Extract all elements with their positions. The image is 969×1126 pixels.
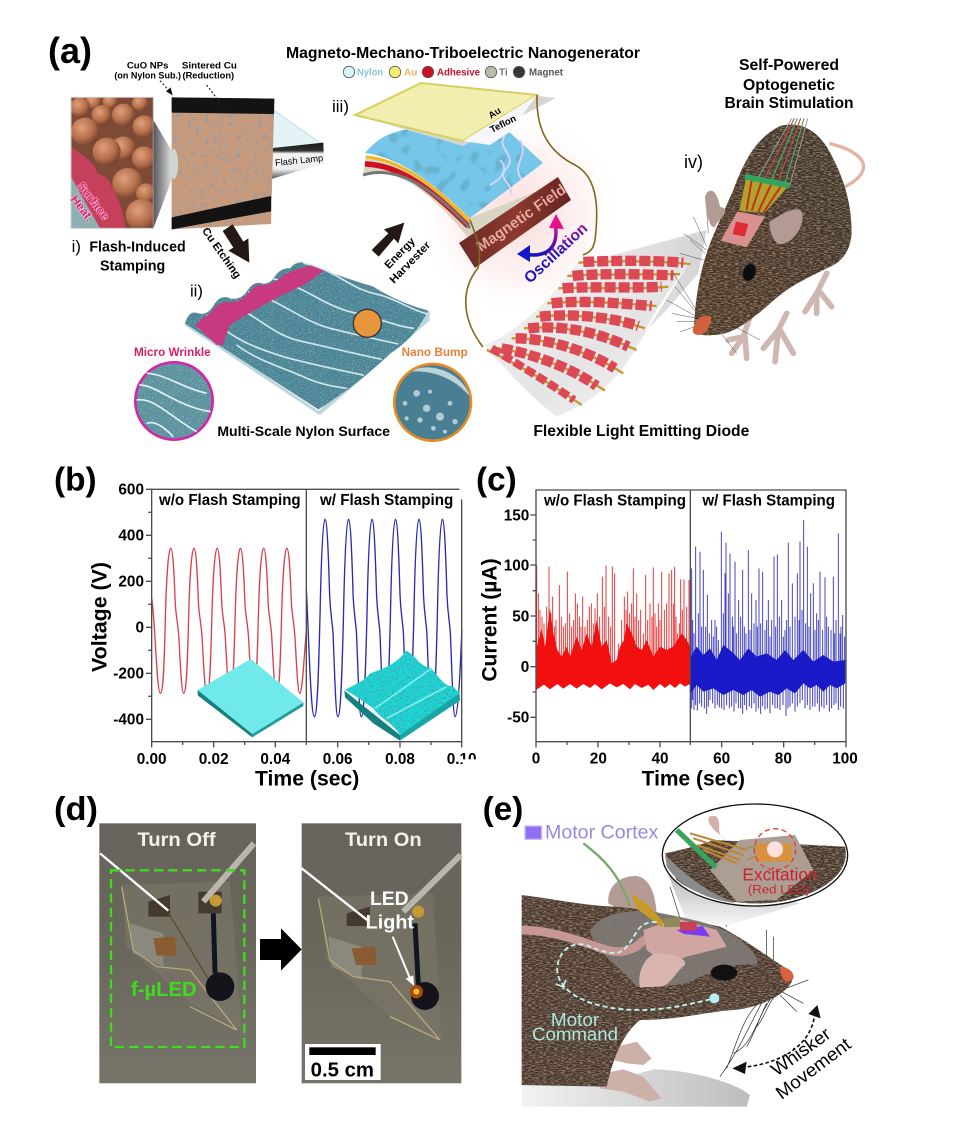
paws xyxy=(600,1042,662,1102)
mouse body xyxy=(522,895,792,1087)
labels and dashed pointers xyxy=(114,60,237,111)
mouse eye and nose xyxy=(693,262,758,335)
x axis labels: 0.00 xyxy=(137,751,167,768)
arrow: Cu etching: Cu Etching xyxy=(199,226,243,281)
y axis labels: 600 xyxy=(118,482,144,499)
front ear xyxy=(639,953,685,987)
material legend: Magnet xyxy=(529,68,564,78)
projection cone to inset xyxy=(668,875,800,925)
arrow: energy harvester: Energy xyxy=(383,235,418,271)
y axis labels: 0 xyxy=(521,659,529,676)
flexible LED sheet xyxy=(483,261,691,417)
magnet block with magnetic field label xyxy=(459,177,571,268)
sub-panel headings xyxy=(543,493,835,510)
brain stimulation heading: Brain Stimulation xyxy=(724,95,854,112)
motor command dashed path xyxy=(557,922,712,1010)
y axis title: Current (µA) xyxy=(478,558,501,682)
title of nanogenerator: Magneto-Mechano-Triboelectric Nanogenerator xyxy=(286,45,640,62)
brain stimulation heading: Optogenetic xyxy=(743,77,835,94)
excitation label: Excitation xyxy=(742,865,818,885)
label: f-µLED: f-µLED xyxy=(131,979,197,1001)
magnetic glow xyxy=(415,110,625,320)
inset: nano bump: Nano Bump xyxy=(402,346,468,359)
red current trace xyxy=(536,565,690,690)
command origin dot xyxy=(709,993,719,1003)
mouse whiskers xyxy=(667,210,760,353)
material legend xyxy=(343,66,564,78)
y axis labels: -400 xyxy=(113,711,144,728)
x axis labels: 0.10 xyxy=(447,751,477,768)
label: turn off: Turn Off xyxy=(137,829,216,851)
sub-panel headings: w/o Flash Stamping xyxy=(158,492,301,509)
arrow: energy harvester: Harvester xyxy=(388,239,434,286)
y axis labels: 0 xyxy=(135,620,144,637)
y axis labels: 400 xyxy=(118,528,144,545)
blue voltage trace xyxy=(306,519,462,717)
arrow between photos xyxy=(260,928,302,971)
red voltage trace xyxy=(152,548,306,693)
mouse tail xyxy=(829,143,864,188)
panel b: voltage chart xyxy=(54,462,483,790)
scale bar xyxy=(305,1044,381,1082)
floor shadow xyxy=(522,1069,750,1107)
LED caption: Flexible Light Emitting Diode xyxy=(533,423,749,440)
clipping patch over last tick label xyxy=(463,759,483,768)
motor cortex legend: Motor Cortex xyxy=(545,822,659,843)
material legend: Ti xyxy=(499,68,508,78)
step iii label: iii) xyxy=(332,97,349,116)
labels and dashed pointers: (on Nylon Sub.) xyxy=(114,71,181,81)
step iv label: iv) xyxy=(684,152,703,172)
inset: nano bump xyxy=(394,346,471,441)
teflon and gold contact plate xyxy=(355,83,556,146)
light cone of flash lamp xyxy=(267,111,323,177)
x axis labels: 20 xyxy=(590,751,607,768)
sub-panel headings xyxy=(158,492,453,509)
x axis labels: 0 xyxy=(532,751,540,768)
teflon and gold contact plate: Au xyxy=(487,105,503,122)
excitation label: (Red LED) xyxy=(748,882,810,896)
panel label e: (e) xyxy=(483,791,523,828)
flash lamp: Flash Lamp xyxy=(274,153,324,168)
whisker movement arrow and label: Movement xyxy=(771,1033,855,1103)
inset: copper spheres with surface heat xyxy=(68,94,158,231)
photo: turn on xyxy=(302,823,461,1083)
zoom wedge to substrate xyxy=(153,120,172,228)
triboelectric sparks xyxy=(490,135,523,195)
label: LED light with arrow: Light xyxy=(366,911,414,933)
x axis labels: 80 xyxy=(775,751,792,768)
x axis title: Time (sec) xyxy=(255,767,359,790)
whisker movement arrow and label xyxy=(732,1005,855,1103)
y axis labels: 50 xyxy=(512,608,529,625)
highlighted nano bump spot xyxy=(353,309,381,337)
inset: micro wrinkle xyxy=(134,346,213,440)
panel label a: (a) xyxy=(48,30,92,71)
x axis labels: 0.08 xyxy=(385,751,415,768)
teflon and gold contact plate: Teflon xyxy=(488,113,518,136)
label: LED light with arrow: LED xyxy=(370,889,409,910)
label: LED light with arrow xyxy=(366,889,414,986)
brain stimulation heading: Self-Powered xyxy=(739,57,839,74)
surgical window xyxy=(721,212,765,247)
y axis labels: -200 xyxy=(113,665,144,682)
label: turn on: Turn On xyxy=(345,829,422,851)
y axis labels: 100 xyxy=(504,557,529,574)
magnet block with magnetic field label: Magnetic Field xyxy=(474,181,569,255)
excitation label xyxy=(742,865,818,896)
axes and ticks xyxy=(530,490,846,747)
y axis labels xyxy=(504,507,529,727)
mouse ears xyxy=(705,191,803,244)
x axis labels xyxy=(532,751,858,768)
mouse body xyxy=(694,125,852,335)
flash lamp xyxy=(261,143,324,179)
whiskers xyxy=(670,887,808,1077)
y axis labels: 150 xyxy=(504,507,529,524)
implant window xyxy=(643,918,727,965)
y axis labels xyxy=(113,482,144,728)
panel d: LED photographs xyxy=(54,791,461,1083)
surface heat label: Surface xyxy=(74,179,113,223)
mouse eye and nose xyxy=(711,965,794,982)
arrow: energy harvester xyxy=(372,223,434,286)
LED glow xyxy=(410,985,423,998)
oscillation curved arrow and label: Oscillation xyxy=(521,220,591,287)
pink tail-like overlay xyxy=(522,930,713,952)
green dashed outline xyxy=(111,870,244,1047)
y axis labels: 200 xyxy=(118,574,144,591)
whisker movement arrow and label: Whisker xyxy=(767,1023,834,1080)
substrate with CuO nanoparticles and sintered Cu xyxy=(170,97,274,229)
step i caption xyxy=(72,237,186,275)
motor command label: Motor xyxy=(551,1009,599,1030)
flexible cable xyxy=(739,118,808,213)
flexible implant cable xyxy=(583,843,680,927)
photo: turn off xyxy=(99,823,256,1083)
panel label d: (d) xyxy=(54,791,98,828)
inset: flat nylon slab xyxy=(198,659,303,737)
sub-panel headings: w/o Flash Stamping xyxy=(543,493,686,510)
magnified inset of LED excitation xyxy=(662,804,848,906)
step i: flash-induced stamping xyxy=(68,60,471,441)
brain stimulation heading xyxy=(724,57,854,112)
x axis labels xyxy=(137,751,477,768)
x axis labels: 60 xyxy=(713,751,730,768)
material legend: Au xyxy=(404,68,417,78)
blue current trace xyxy=(691,520,845,716)
material legend: Adhesive xyxy=(437,68,480,78)
labels and dashed pointers: CuO NPs xyxy=(127,60,168,70)
material legend: Nylon xyxy=(357,68,383,78)
gold wire outline xyxy=(466,95,597,347)
motor command label: Command xyxy=(532,1024,618,1045)
inset: micro wrinkle: Micro Wrinkle xyxy=(134,346,211,359)
step i caption: Flash-Induced xyxy=(89,240,186,256)
panel label c: (c) xyxy=(476,462,517,499)
panel a: fabrication, nanogenerator and brain stimulation schematic xyxy=(48,30,864,441)
x axis labels: 0.02 xyxy=(199,751,229,768)
step i caption: i) xyxy=(72,237,81,256)
scale bar: 0.5 cm xyxy=(311,1060,374,1082)
x axis labels: 0.04 xyxy=(260,751,291,768)
motor cortex target with LED xyxy=(677,922,710,937)
highlighted micro wrinkle strip xyxy=(195,265,324,345)
surface heat label: Heat. xyxy=(68,193,97,224)
direction chevron xyxy=(556,980,566,989)
x axis labels: 100 xyxy=(832,751,858,768)
axes and ticks xyxy=(146,489,462,747)
multi-scale wrinkled nylon surface xyxy=(185,262,428,413)
panel c: current chart xyxy=(476,462,858,790)
mouse feet xyxy=(728,273,832,362)
nanogenerator device xyxy=(355,83,625,347)
x axis labels: 40 xyxy=(651,751,669,768)
y axis title: Voltage (V) xyxy=(88,562,111,672)
motor command label xyxy=(532,1009,618,1045)
panel e: mouse motor cortex stimulation xyxy=(483,791,855,1107)
y axis labels: -50 xyxy=(507,710,529,727)
x axis title: Time (sec) xyxy=(642,767,745,790)
inset: wrinkled nylon slab xyxy=(344,651,460,741)
step ii label: ii) xyxy=(190,282,203,301)
sub-panel headings: w/ Flash Stamping xyxy=(701,493,835,510)
labels and dashed pointers: (Reduction) xyxy=(182,71,234,81)
surface caption: Multi-Scale Nylon Surface xyxy=(217,423,390,439)
projection cone xyxy=(557,230,707,417)
x axis labels: 0.06 xyxy=(323,751,353,768)
nylon arch layers xyxy=(363,128,543,252)
implanted red LED array xyxy=(733,222,748,237)
sub-panel headings: w/ Flash Stamping xyxy=(319,492,453,509)
labels and dashed pointers: Sintered Cu xyxy=(182,60,237,70)
panel label b: (b) xyxy=(54,462,97,499)
back ear xyxy=(608,876,657,913)
flexible LED and mouse xyxy=(483,118,864,440)
translucent grey skull region xyxy=(590,911,758,987)
step i caption: Stamping xyxy=(100,259,165,275)
